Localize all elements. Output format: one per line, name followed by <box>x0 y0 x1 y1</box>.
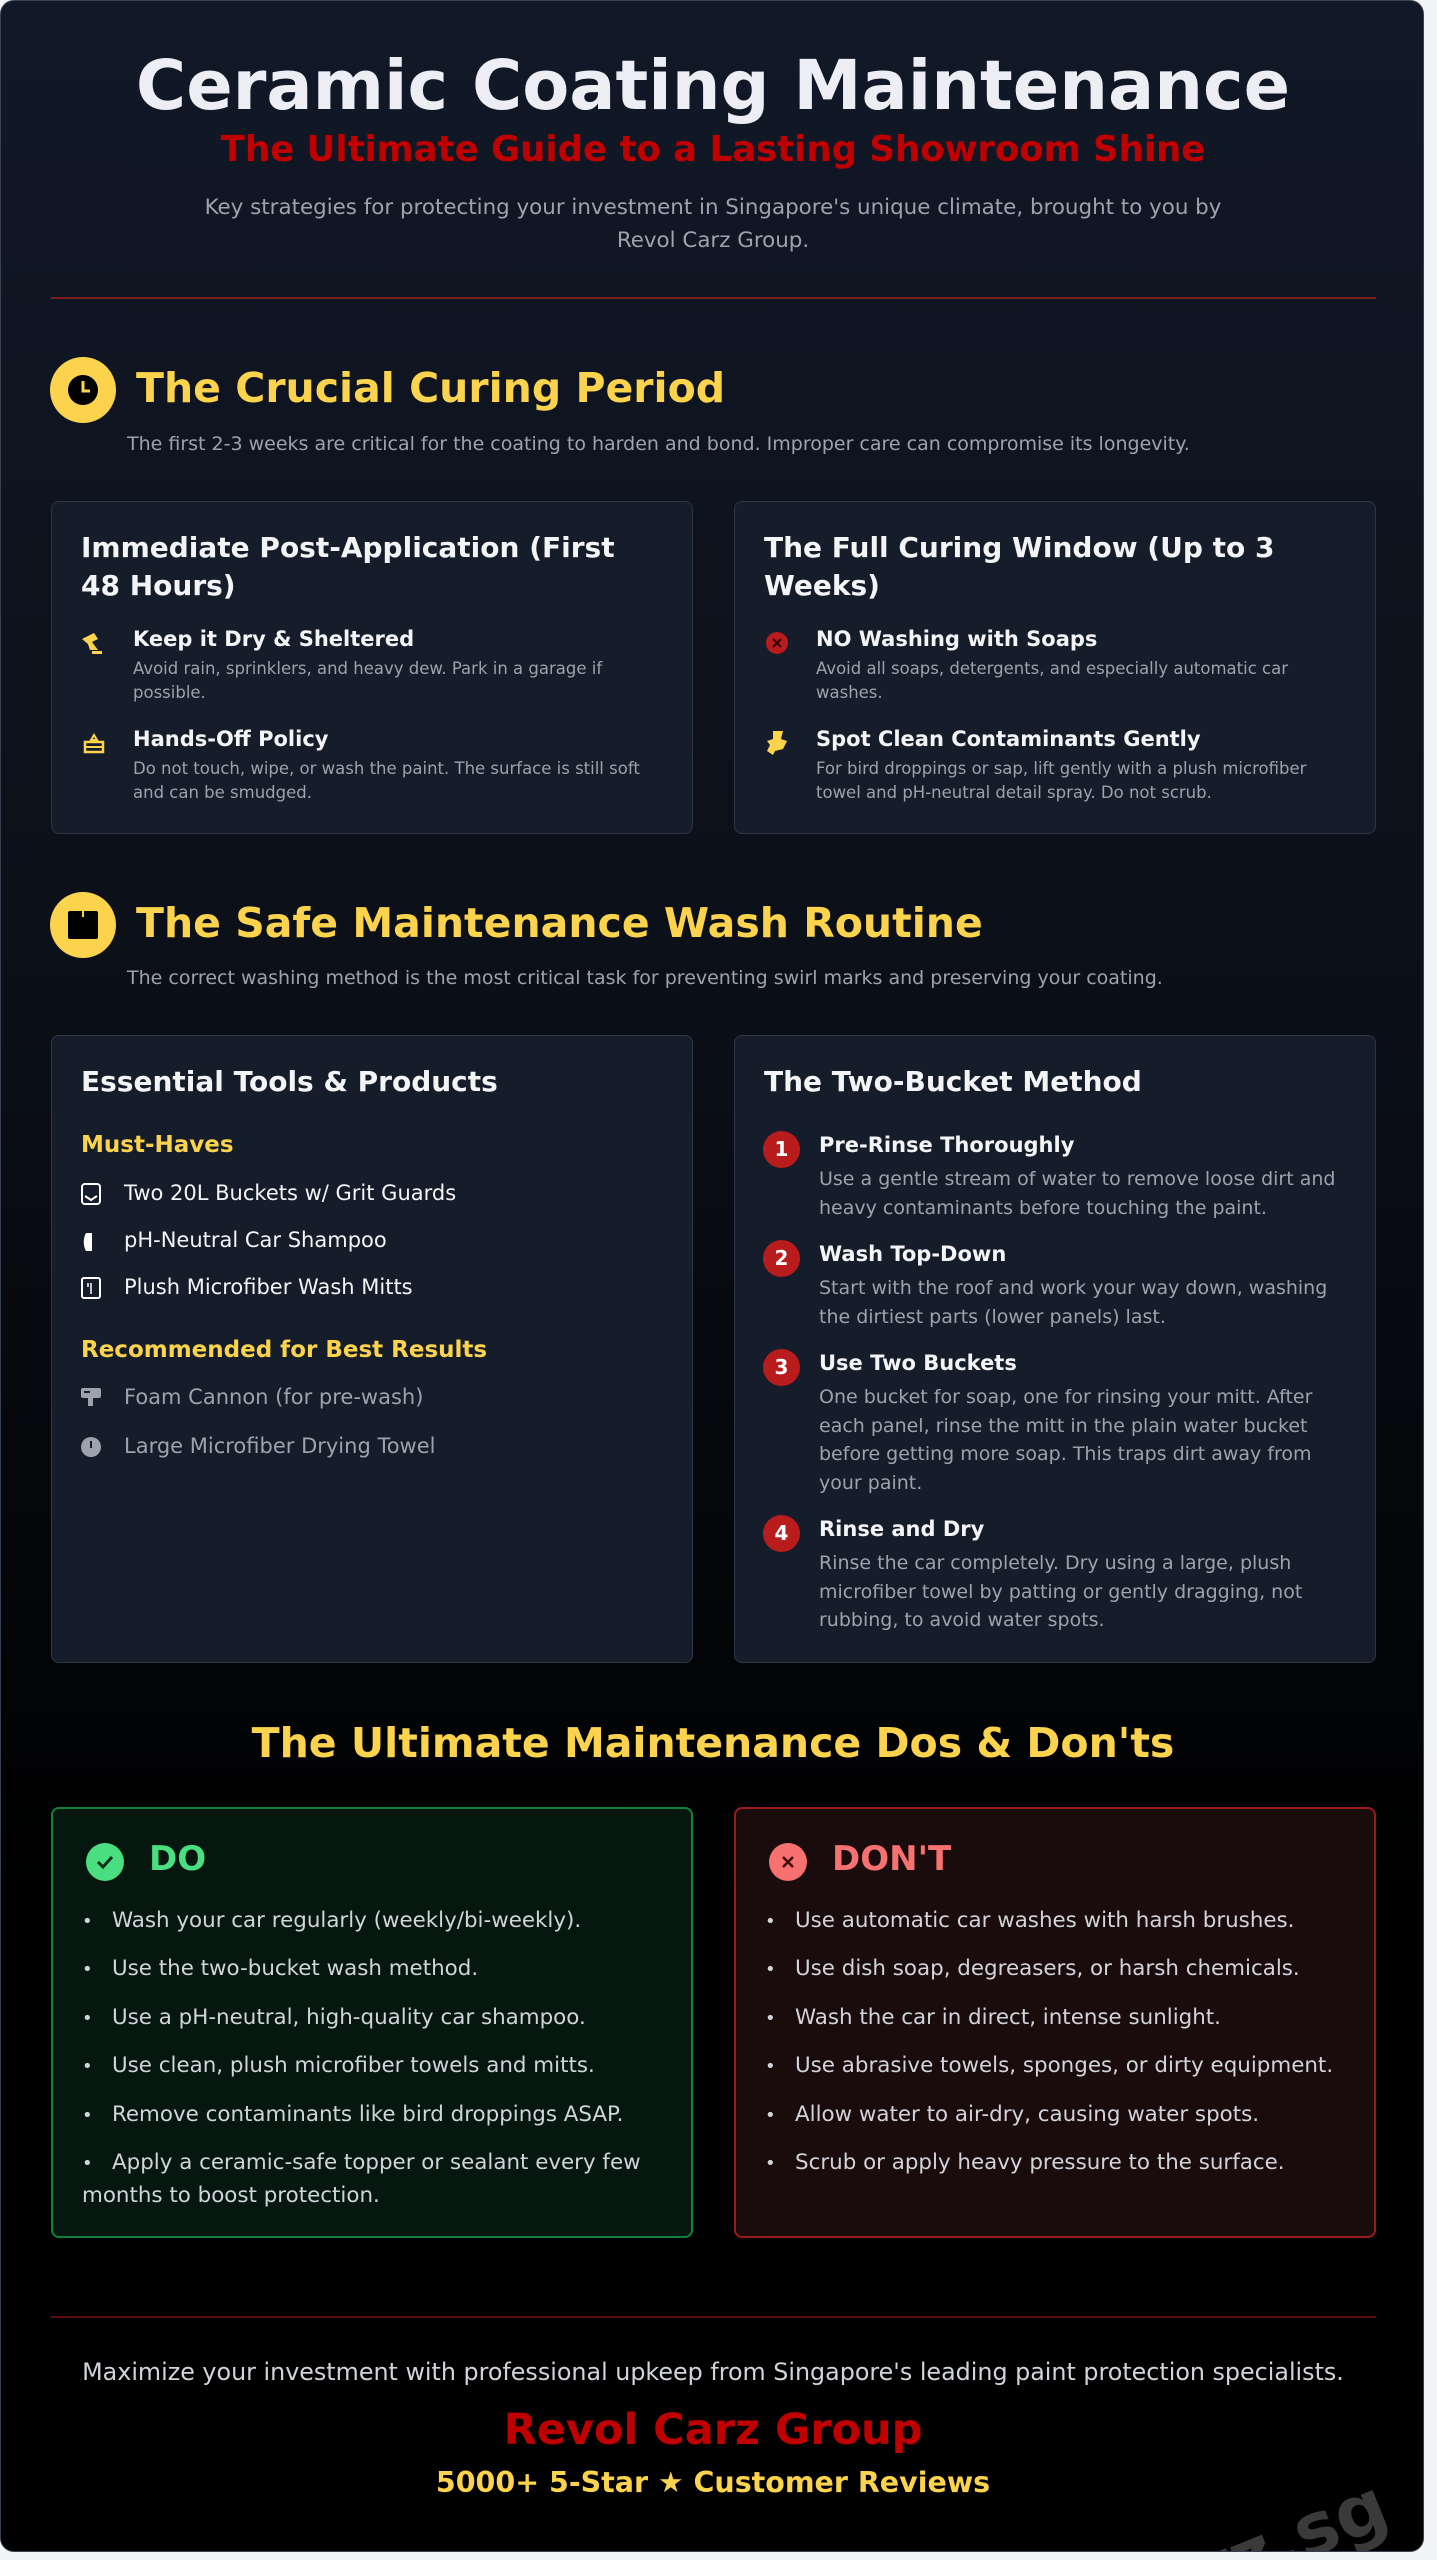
must-haves heading: Must-Haves <box>81 1132 234 1158</box>
tool: buckets: Two 20L Buckets w/ Grit Guards <box>124 1181 456 1205</box>
item: no soap: NO Washing with Soaps <box>816 627 1097 651</box>
heading: curing period: The Crucial Curing Period <box>136 364 725 412</box>
item: spot clean <box>767 727 1306 802</box>
panel: first 48 hours <box>51 501 693 834</box>
wash subtext: The correct washing method is the most critical task for preventing swirl marks and preserving your coating. <box>127 967 1163 989</box>
heading: wash routine: The Safe Maintenance Wash Routine <box>136 899 983 947</box>
do list: Remove contaminants like bird droppings ASAP. <box>112 2102 623 2127</box>
tool: foam cannon: Foam Cannon (for pre-wash) <box>124 1385 423 1409</box>
step 3: 3 <box>775 1355 788 1379</box>
tool: shampoo: pH-Neutral Car Shampoo <box>124 1228 387 1252</box>
item: keep dry <box>82 627 602 702</box>
panel: two-bucket method <box>734 1035 1376 1663</box>
step 3: One bucket for soap, one for rinsing your mitt. After each panel, rinse the mitt in the plain water bucket before getting more soap. This traps dirt away from your paint. <box>819 1386 1312 1494</box>
heading: dos and don'ts: The Ultimate Maintenance Dos & Don'ts <box>252 1719 1174 1767</box>
do list: Apply a ceramic-safe topper or sealant every few months to boost protection. <box>82 2150 641 2208</box>
step 1 <box>763 1131 1335 1218</box>
step 2: Wash Top-Down <box>819 1242 1006 1266</box>
do list: Wash your car regularly (weekly/bi-weekly). <box>112 1908 581 1933</box>
icon: check <box>86 1843 124 1881</box>
card heading: 48 Hours) <box>81 569 236 602</box>
step 4 <box>763 1515 1302 1631</box>
card heading: Immediate Post-Application (First <box>81 531 615 564</box>
DON'T heading: DON'T <box>832 1839 951 1879</box>
recommended heading: Recommended for Best Results <box>81 1337 487 1363</box>
item: hands off: Do not touch, wipe, or wash the paint. The surface is still soft and can be smudged. <box>133 759 640 802</box>
item: keep dry: Keep it Dry & Sheltered <box>133 627 414 651</box>
item: spot clean: Spot Clean Contaminants Gently <box>816 727 1201 751</box>
don't list: Use abrasive towels, sponges, or dirty equipment. <box>795 2053 1333 2078</box>
footer text: Maximize your investment with professional upkeep from Singapore's leading paint protection specialists. <box>82 2358 1344 2386</box>
step 4: 4 <box>775 1521 788 1545</box>
item: hands off <box>84 727 640 802</box>
step 3 <box>763 1349 1312 1494</box>
do list: Use the two-bucket wash method. <box>112 1956 478 1981</box>
panel: DO <box>51 1807 693 2238</box>
card heading: Weeks) <box>764 569 880 602</box>
step 2: Start with the roof and work your way down, washing the dirtiest parts (lower panels) last. <box>819 1277 1327 1328</box>
panel: DON'T <box>734 1807 1376 2238</box>
card heading <box>764 531 1274 602</box>
step 1: Use a gentle stream of water to remove loose dirt and heavy contaminants before touching the paint. <box>819 1168 1335 1218</box>
don't list <box>768 1908 1333 2175</box>
icon: cross <box>769 1843 807 1881</box>
item: no soap <box>766 627 1288 702</box>
curing subtext: The first 2-3 weeks are critical for the coating to harden and bond. Improper care can compromise its longevity. <box>127 433 1190 455</box>
reviews: 5000+ 5-Star ★ Customer Reviews <box>436 2466 990 2499</box>
step 1: Pre-Rinse Thoroughly <box>819 1133 1074 1157</box>
panel: full curing window <box>734 501 1376 834</box>
step 2: 2 <box>775 1246 788 1270</box>
title: Ceramic Coating Maintenance <box>136 46 1290 126</box>
intro text: Key strategies for protecting your investment in Singapore's unique climate, brought to you by Revol Carz Group. <box>205 195 1221 253</box>
icon: clock <box>50 357 116 423</box>
icon: book <box>50 892 116 958</box>
don't list: Allow water to air-dry, causing water spots. <box>795 2102 1259 2127</box>
panel: essential tools <box>51 1035 693 1663</box>
card heading: The Full Curing Window (Up to 3 <box>764 531 1274 564</box>
card heading: The Two-Bucket Method <box>764 1065 1142 1098</box>
step 4: Rinse the car completely. Dry using a large, plush microfiber towel by patting or gently dragging, not rubbing, to avoid water spots. <box>819 1552 1302 1631</box>
don't list: Use automatic car washes with harsh brushes. <box>795 1908 1294 1933</box>
tool: mitts: Plush Microfiber Wash Mitts <box>124 1275 413 1299</box>
do list: Use a pH-neutral, high-quality car shampoo. <box>112 2005 586 2030</box>
brand name: Revol Carz Group <box>504 2405 922 2455</box>
step 3: Use Two Buckets <box>819 1351 1017 1375</box>
item: spot clean: For bird droppings or sap, lift gently with a plush microfiber towel and pH-neutral detail spray. Do not scrub. <box>816 759 1306 802</box>
item: no soap: Avoid all soaps, detergents, and especially automatic car washes. <box>816 659 1288 702</box>
do list: Use clean, plush microfiber towels and mitts. <box>112 2053 595 2078</box>
item: keep dry: Avoid rain, sprinklers, and heavy dew. Park in a garage if possible. <box>133 659 602 702</box>
step 4: Rinse and Dry <box>819 1517 984 1541</box>
step 1: 1 <box>775 1137 788 1161</box>
don't list: Use dish soap, degreasers, or harsh chemicals. <box>795 1956 1300 1981</box>
card heading <box>81 531 615 602</box>
do list <box>82 1908 641 2208</box>
tool: drying towel: Large Microfiber Drying Towel <box>124 1434 435 1458</box>
DO heading: DO <box>149 1839 206 1879</box>
subtitle: The Ultimate Guide to a Lasting Showroom Shine <box>221 129 1205 170</box>
step 2 <box>763 1240 1327 1328</box>
don't list: Wash the car in direct, intense sunlight. <box>795 2005 1221 2030</box>
don't list: Scrub or apply heavy pressure to the surface. <box>795 2150 1285 2175</box>
item: hands off: Hands-Off Policy <box>133 727 328 751</box>
card heading: Essential Tools & Products <box>81 1065 498 1098</box>
